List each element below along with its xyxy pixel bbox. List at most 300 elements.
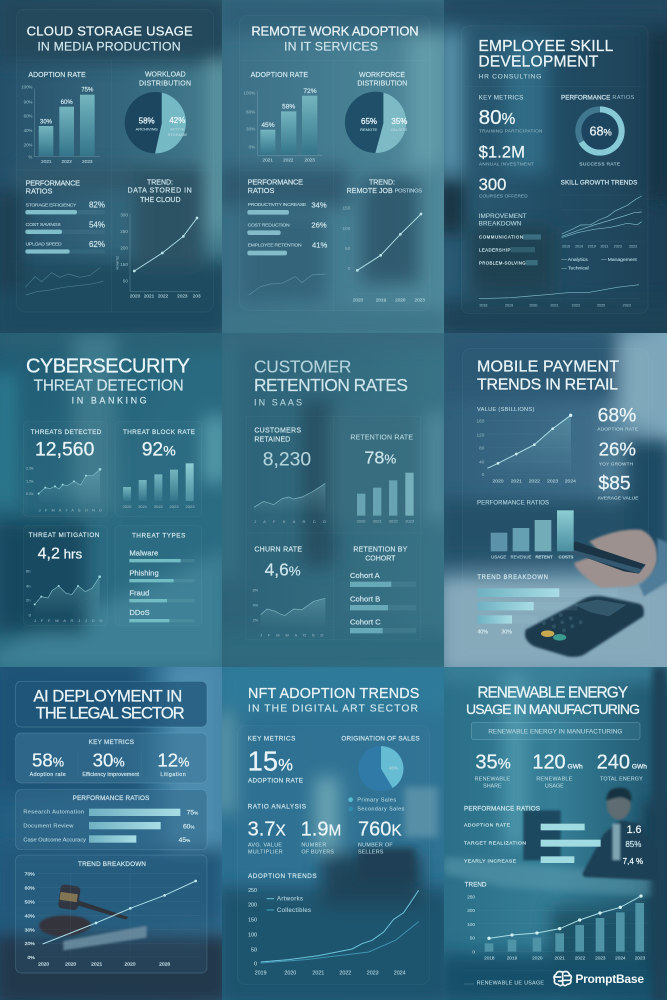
card: threat mitigation: 4h (26, 583, 30, 588)
key metrics: 80% (479, 106, 516, 129)
bar chart: adoption rate: 72% (303, 88, 317, 95)
performance ratios: YEARLY INCREASE (464, 858, 517, 864)
key metrics: ADOPTION RATE (248, 778, 303, 785)
line chart: value: 2021 (511, 479, 522, 485)
card: threat types (115, 526, 202, 626)
card: trend breakdown line chart: 2026 (159, 962, 170, 968)
performance ratios: PERFORMANCE (26, 178, 80, 187)
card: trend breakdown line chart: 60% (25, 885, 35, 891)
card: title (16, 681, 207, 727)
bar chart: adoption rate: 2022 (283, 158, 294, 163)
key metrics: TOTAL ENERGY (600, 776, 643, 782)
card: threat mitigation (23, 526, 107, 626)
line chart: skill growth trends: 2023 (614, 244, 622, 248)
bar chart: trend breakdown: TREND BREAKDOWN (477, 575, 548, 581)
line chart: adoption trends: 2022 (339, 971, 351, 977)
performance ratios: PERFORMANCE (248, 178, 303, 187)
illustration: blurred person at desk (444, 788, 657, 897)
card: performance ratios: PERFORMANCE RATIOS (73, 795, 149, 802)
line chart: skill growth trends: SKILL GROWTH TRENDS (561, 179, 637, 186)
key metrics: 300 (479, 175, 506, 194)
performance ratios: STORAGE EFFICIENCY (26, 203, 77, 209)
pie chart: workforce distribution (345, 72, 407, 153)
pie chart: origination of sales: 45% (389, 766, 398, 771)
bar chart: adoption rate: 0% (249, 145, 255, 150)
illustration: payment terminal (525, 596, 644, 657)
card: churn rate: CHURN RATE (254, 547, 302, 554)
card: trend breakdown line chart: 2021 (91, 962, 102, 968)
card: retention rate: 2023 (405, 519, 415, 524)
panel: remote work adoption in IT services (215, 0, 455, 337)
bar chart: trend breakdown: 40% (477, 629, 488, 635)
title: DEVELOPMENT (478, 54, 599, 71)
pie chart: origination of sales: ORIGINATION OF SALES (341, 736, 420, 743)
bar chart: adoption rate (21, 72, 100, 164)
key metrics: RENEWABLE (536, 776, 573, 782)
card: threats detected: J F M A J A S O N D (39, 508, 102, 513)
card: performance ratios (16, 790, 207, 850)
card: customers retained: J A F K A R C D (254, 519, 326, 524)
ratio analysis: NUMBER (301, 842, 326, 848)
performance ratios: 34% (311, 200, 327, 209)
pie chart: workforce distribution: DISTRIBUTION (357, 80, 407, 87)
donut chart: success rate: PERFORMANCE (561, 94, 610, 101)
line chart: data stored in the cloud: 200 (120, 245, 128, 250)
pie chart: workforce distribution: ON-SITE (391, 127, 407, 132)
combo chart: trend: 50 (470, 936, 475, 941)
bar chart: adoption rate: 2022 (61, 159, 72, 164)
line chart: long-range trend: 2023 (623, 303, 631, 307)
card: key metrics: KEY METRICS (89, 739, 134, 746)
line chart: remote job postings: 100 (343, 226, 351, 231)
performance ratios: PERFORMANCE RATIOS (464, 805, 540, 812)
ratio analysis: RATIO ANALYSIS (248, 804, 306, 811)
card: threat block rate: 2021 (138, 504, 148, 509)
card: customers retained: CUSTOMERS (254, 428, 301, 435)
combo chart: trend: 0 (472, 949, 475, 954)
title (477, 360, 619, 390)
improvement breakdown (479, 213, 541, 265)
bar chart: adoption rate: ADOPTION RATE (251, 72, 308, 79)
line chart: long-range trend: 2020 (529, 303, 537, 307)
card: retention by cohort: Cohort C (350, 617, 381, 626)
key figures: 68% (598, 406, 636, 427)
card: threat block rate: THREAT BLOCK RATE (123, 429, 195, 436)
panel: employee skill development (437, 0, 667, 337)
card: threat block rate: 2023 (186, 504, 195, 509)
key metrics: 120 GWh (532, 752, 583, 774)
pie chart: workload distribution: 58% (139, 117, 155, 126)
card: threat mitigation: 2h (26, 598, 30, 603)
combo chart: trend: 2021 (554, 956, 565, 961)
card: trend breakdown line chart: TREND BREAKDOWN (78, 861, 146, 868)
card: retention rate: 2021 (373, 519, 383, 524)
title: CLOUD STORAGE USAGE (27, 23, 193, 38)
performance ratios: RATIOS (26, 187, 53, 196)
card: title: THE LEGAL SECTOR (36, 704, 185, 723)
title: IN IT SERVICES (284, 40, 378, 54)
line chart: data stored in the cloud: 300 (120, 213, 128, 218)
donut chart: success rate: 68% (589, 125, 612, 139)
performance ratios: 41% (312, 241, 328, 250)
line chart: adoption trends: 0 (254, 962, 257, 968)
bar chart: performance ratios: RETENT (535, 555, 553, 560)
line chart: data stored in the cloud: PETABYTES (117, 255, 120, 269)
line chart: remote job postings: TREND: (369, 179, 395, 186)
line chart: data stored in the cloud: 2023 (177, 294, 188, 299)
performance ratios: 82% (89, 200, 105, 209)
pie chart: workload distribution: WORKLOAD (145, 72, 186, 79)
line chart: value: 160 (477, 418, 485, 423)
line chart: value: 2022 (529, 479, 540, 485)
bar chart: performance ratios: PERFORMANCE RATIOS (477, 501, 549, 507)
ratio analysis: NUMBER OF (358, 842, 393, 848)
bar chart: trend breakdown: 30% (501, 629, 512, 635)
line chart: adoption trends: Collectibles (277, 908, 311, 914)
title (478, 38, 614, 81)
card: threat mitigation: THREAT MITIGATION (29, 532, 100, 539)
line chart: adoption trends: ADOPTION TRENDS (248, 873, 317, 880)
ratio analysis: 760K (358, 819, 402, 841)
pie chart: workforce distribution: 65% (361, 117, 377, 126)
bar chart: adoption rate: 60% (246, 109, 255, 114)
line chart: adoption trends: 2020 (284, 971, 296, 977)
card: performance ratios: Document Review (23, 824, 74, 830)
bar chart: adoption rate: 30% (246, 127, 255, 132)
card: performance ratios: 45% (179, 837, 190, 844)
title: MOBILE PAYMENT (477, 358, 619, 375)
improvement breakdown: BREAKDOWN (479, 220, 522, 227)
pie chart: workload distribution (125, 72, 191, 153)
performance ratios: 7,4 % (623, 857, 643, 866)
line chart: remote job postings: 2020 (395, 298, 406, 303)
line chart: adoption trends: 2023 (367, 971, 379, 977)
card: retention by cohort (350, 547, 416, 633)
card: churn rate: 8% (253, 588, 259, 592)
bar chart: performance ratios: COSTS (559, 555, 574, 560)
title: IN THE DIGITAL ART SECTOR (248, 704, 418, 715)
bar chart: adoption rate: 30% (40, 119, 53, 125)
card: performance ratios: 75% (187, 810, 198, 817)
performance ratios: RATIOS (248, 186, 275, 195)
card: threat types: DDoS (129, 608, 150, 617)
panel: customer retention rates in SaaS (222, 333, 444, 667)
panel: renewable energy usage in manufacturing (437, 660, 667, 1000)
performance ratios: 62% (89, 240, 105, 249)
pie chart: workload distribution: 42% (169, 116, 185, 125)
key metrics: KEY METRICS (248, 736, 295, 743)
line chart: skill growth trends: — Analytics (562, 257, 588, 263)
card: threats detected: 1.5k (26, 479, 34, 484)
performance ratios (25, 178, 105, 295)
title: CUSTOMER (254, 356, 351, 376)
line chart: value: VALUE (SBILLIONS) (477, 407, 534, 413)
ratio analysis: 1.9M (301, 819, 341, 841)
ratio analysis: AVG. VALUE (248, 842, 282, 848)
line chart: long-range trend (479, 285, 641, 307)
card: trend breakdown line chart: 30% (25, 927, 35, 933)
card: threat types: THREAT TYPES (132, 533, 185, 540)
bar chart: adoption rate: ADOPTION RATE (28, 72, 86, 79)
card: trend breakdown line chart: 0% (27, 955, 35, 961)
line chart: skill growth trends: 2019 (575, 244, 583, 248)
combo chart: trend: 2019 (507, 956, 518, 961)
card: threat block rate: 92% (142, 440, 176, 461)
key figures: YOY GROWTH (599, 461, 633, 466)
card: churn rate: J F M M A O S D (260, 632, 323, 637)
line chart: adoption trends: 200 (248, 903, 257, 909)
card: customers retained: RETAINED (254, 436, 290, 443)
title: IN SAAS (254, 397, 302, 407)
line chart: value: 40 (479, 459, 485, 464)
performance ratios (464, 805, 643, 866)
line chart: data stored in the cloud: THE CLOUD (140, 197, 181, 204)
bar chart: adoption rate: 90% (24, 99, 32, 104)
panel: cloud storage usage in media production (0, 0, 233, 340)
bar chart: adoption rate: 75% (81, 87, 94, 93)
combo chart: trend: 2022 (575, 956, 586, 961)
line chart: data stored in the cloud: 250 (120, 229, 128, 234)
line chart: long-range trend: 2019 (505, 303, 513, 307)
ratio analysis: MULTIPLIER (248, 850, 283, 856)
title (27, 26, 192, 51)
card: churn rate: 4,6% (265, 560, 301, 580)
performance ratios: PRODUCTIVITY INCREASE (248, 202, 307, 208)
key figures: $85 (598, 474, 631, 495)
line chart: skill growth trends: 2021 (600, 244, 608, 248)
line chart: data stored in the cloud: DATA STORED IN (128, 188, 192, 195)
card: threat block rate: 2023 (170, 504, 179, 509)
card: retention by cohort: Cohort A (350, 571, 381, 580)
panel: AI deployment in the legal sector (0, 660, 233, 1000)
panel: NFT adoption trends in the digital art sector (215, 660, 455, 1000)
card: key metrics: 58% (32, 749, 64, 770)
line chart: skill growth trends: — Management (601, 257, 637, 263)
key metrics: USAGE (545, 784, 564, 790)
key metrics: ANNUAL INVESTMENT (479, 162, 534, 167)
title: REMOTE WORK ADOPTION (251, 23, 419, 38)
bar chart: adoption rate: 60% (24, 114, 32, 119)
line chart: value: 2023 (547, 479, 558, 485)
card: retention by cohort: Cohort B (350, 594, 380, 603)
card: threat types: Phishing (129, 568, 159, 577)
title (252, 26, 418, 51)
title: TRENDS IN RETAIL (477, 376, 618, 393)
pie chart: workforce distribution: 35% (391, 117, 407, 126)
combo chart: trend: RENEWABLE UE USAGE (477, 981, 544, 987)
line chart: data stored in the cloud: 203 (193, 294, 201, 299)
combo chart: trend: 2023 (635, 956, 646, 961)
title (248, 686, 419, 715)
line chart: data stored in the cloud: 2020 (130, 294, 141, 299)
bar chart: adoption rate: 58% (282, 104, 295, 111)
line chart: skill growth trends: 2018 (562, 244, 570, 248)
line chart: value: 120 (477, 432, 485, 437)
panel: cybersecurity threat detection in banking (0, 326, 233, 670)
key metrics: COURSES OFFERED (479, 194, 528, 199)
line chart: data stored in the cloud: 150 (120, 262, 128, 267)
card: key metrics: Adoption rate (30, 772, 66, 778)
performance ratios: 1.6 (627, 824, 642, 836)
key figures (597, 406, 638, 500)
ratio analysis: SELLERS (358, 850, 384, 856)
subtitle box: RENEWABLE ENERGY IN MANUFACTURING (488, 729, 622, 736)
line chart: adoption trends: 2021 (312, 971, 324, 977)
title (26, 355, 190, 406)
line chart: remote job postings: 2023 (414, 298, 425, 303)
bar chart: adoption rate: 2023 (82, 159, 93, 164)
donut chart: success rate: RATIOS (612, 95, 635, 101)
ratio analysis (248, 804, 402, 856)
line chart: skill growth trends: 2023 (629, 244, 637, 248)
line chart: adoption trends (248, 873, 419, 977)
key metrics: TRAINING PARTICIPATION (479, 129, 542, 134)
key metrics: 35% (475, 752, 511, 774)
panel: mobile payment trends in retail (437, 326, 667, 676)
card: trend breakdown line chart: 20% (25, 941, 35, 947)
bar chart: performance ratios (477, 501, 574, 560)
card: trend breakdown line chart: 2020 (124, 962, 136, 968)
donut chart: success rate: SUCCESS RATE (579, 162, 620, 167)
line chart: adoption trends: 2024 (394, 971, 406, 977)
card: customers retained (254, 428, 326, 524)
pie chart: workload distribution: ARCHIVING (136, 127, 158, 132)
combo chart: trend: 2020 (532, 956, 543, 961)
card: retention rate: 78% (364, 448, 396, 468)
illustration: hand holding phone (564, 529, 667, 596)
key figures: 26% (599, 439, 636, 460)
line chart: remote job postings: 2020 (353, 298, 364, 303)
card: threat mitigation: 4,2 hrs (38, 546, 82, 563)
card: trend breakdown line chart: 2020 (38, 962, 49, 968)
performance ratios: EMPLOYEE RETENTION (248, 242, 302, 248)
line chart: value (477, 407, 576, 485)
combo chart: trend: 200 (467, 908, 475, 913)
line chart: remote job postings: 2019 (376, 298, 387, 303)
performance ratios: 85% (625, 840, 641, 849)
performance ratios: COST REDUCTION (248, 223, 290, 229)
card: churn rate: 2% (253, 618, 259, 622)
donut chart: success rate (561, 94, 635, 167)
card: key metrics: 30% (93, 749, 125, 770)
title: IN MEDIA PRODUCTION (37, 40, 181, 54)
line chart: long-range trend: 2025 (597, 303, 605, 307)
line chart: remote job postings: 50 (345, 246, 351, 251)
line chart: long-range trend: 2021 (550, 303, 558, 307)
performance ratios: 54% (89, 220, 105, 229)
logo: PromptBase: PromptBase (575, 972, 644, 986)
line chart: data stored in the cloud (117, 179, 201, 299)
pie chart: workforce distribution: REMOTE (360, 127, 378, 132)
line chart: data stored in the cloud: TREND: (147, 179, 173, 186)
bar chart: adoption rate: 45% (261, 122, 275, 129)
card: retention rate (350, 434, 415, 524)
subtitle box (471, 722, 640, 740)
line chart: value: 0 (482, 472, 485, 477)
title (254, 360, 408, 406)
card: performance ratios: Case Outcome Accuracy (23, 837, 86, 843)
title: NFT ADOPTION TRENDS (248, 686, 419, 702)
card: trend breakdown line chart: 50% (25, 899, 35, 905)
key figures: ADOPTION RATE (597, 427, 638, 432)
bar chart: adoption rate: 60% (61, 100, 73, 106)
key metrics: KEY METRICS (479, 94, 523, 101)
title: EMPLOYEE SKILL (478, 38, 614, 55)
line chart: value: 2024 (565, 479, 576, 485)
bar chart: adoption rate (243, 72, 322, 163)
bar chart: trend breakdown (477, 575, 617, 635)
bar chart: adoption rate: 100% (21, 85, 32, 90)
key metrics (479, 94, 542, 199)
card: key metrics: 12% (157, 749, 189, 770)
card: key metrics: Efficiency improvement (82, 772, 140, 778)
bar chart: adoption rate: 2021 (41, 159, 52, 164)
card: trend breakdown line chart: 2020 (65, 962, 76, 968)
title: RETENTION RATES (254, 375, 408, 395)
line chart: remote job postings: POSTINGS (395, 188, 422, 194)
improvement breakdown: PROBLEM-SOLVING (479, 260, 526, 265)
title: CYBERSECURITY (26, 355, 190, 377)
line chart: skill growth trends: 2019 (588, 244, 596, 248)
card: key metrics: Litigation (160, 772, 186, 778)
line chart: adoption trends: 100 (248, 932, 257, 938)
performance ratios: UPLOAD SPEED (26, 242, 62, 248)
bar chart: adoption rate: 100% (243, 91, 255, 96)
key metrics: 240 GWh (597, 752, 647, 774)
card: threat block rate: 2020 (123, 504, 132, 509)
title: THREAT DETECTION (34, 377, 184, 394)
pie chart: origination of sales: Secondary Sales (357, 807, 405, 813)
title: HR CONSULTING (479, 74, 541, 81)
line chart: value: 2020 (492, 479, 504, 485)
card: threat mitigation: 6h (26, 569, 30, 574)
bar chart: adoption rate: % (28, 155, 32, 160)
line chart: remote job postings: REMOTE JOB (347, 188, 393, 195)
card: retention rate: 2022 (389, 519, 399, 524)
key metrics: $1.2M (479, 143, 525, 162)
improvement breakdown: COMMUNICATION (479, 235, 523, 240)
pie chart: workload distribution: STORAGE (168, 132, 187, 137)
pie chart: workload distribution: ACTIVE (170, 127, 185, 132)
illustration: gavel on book (39, 884, 147, 950)
bar chart: adoption rate: 2023 (304, 158, 315, 163)
pie chart: origination of sales: Primary Sales (357, 797, 396, 803)
pie chart: workload distribution: DISTRIBUTION (139, 80, 191, 87)
line chart: adoption trends: 2019 (255, 971, 267, 977)
performance ratios: COST SAVINGS (26, 222, 61, 228)
card: threat mitigation: J F F M A R J J D D (34, 618, 102, 623)
card: retention by cohort: COHORT (365, 556, 396, 563)
pie chart: origination of sales (341, 736, 420, 813)
title: RENEWABLE ENERGY (477, 685, 628, 702)
performance ratios (247, 178, 328, 295)
combo chart: trend (464, 882, 647, 987)
card: key metrics (16, 733, 207, 783)
bar chart: performance ratios: USAGE (491, 555, 506, 560)
card: threat types: Fraud (129, 588, 149, 597)
line chart: data stored in the cloud: 2022 (158, 294, 169, 299)
combo chart: trend: 250 (467, 894, 475, 899)
card: retention rate: RETENTION RATE (350, 434, 413, 441)
card: performance ratios: Research Automation (23, 810, 84, 816)
card: customers retained: 8,230 (263, 449, 311, 470)
card: retention by cohort: RETENTION BY (353, 547, 408, 554)
title (466, 685, 640, 717)
title: USAGE IN MANUFACTURING (466, 701, 640, 717)
card: threats detected (23, 421, 107, 516)
line chart: remote job postings: 0 (348, 266, 351, 271)
card: trend breakdown line chart: 70% (25, 871, 35, 877)
